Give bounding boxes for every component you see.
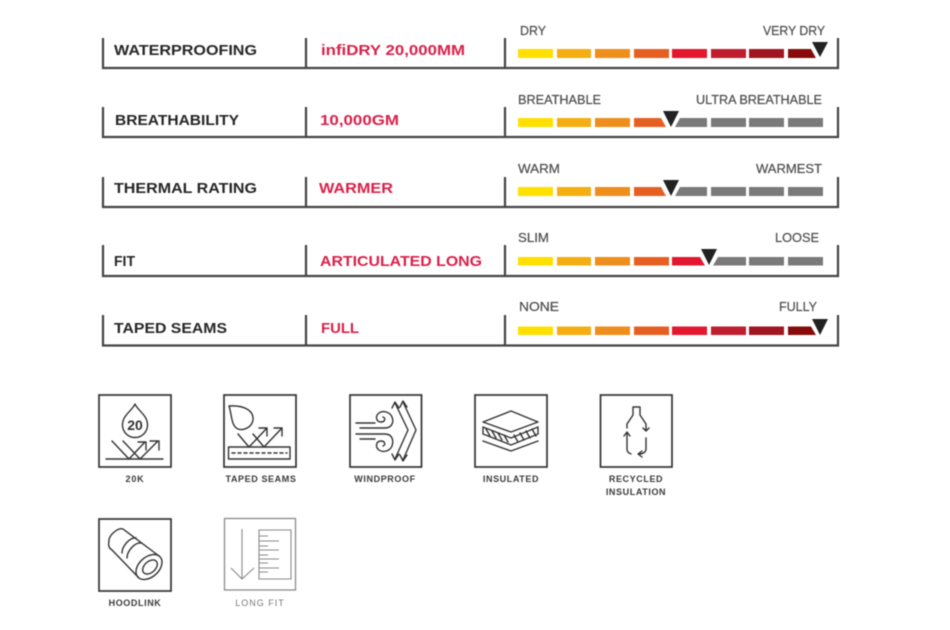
- scale label: slim: SLIM: [518, 231, 549, 245]
- scale label: ultra breathable: ULTRA BREATHABLE: [696, 93, 822, 107]
- label: waterproofing: WATERPROOFING: [114, 42, 257, 59]
- marker: [663, 180, 679, 196]
- scale label: warm: WARM: [518, 162, 560, 176]
- caption: recycled insulation: RECYCLED: [609, 474, 663, 484]
- icon: insulated: [475, 395, 547, 484]
- rating bar: taped seams: [518, 326, 816, 335]
- marker: [812, 42, 828, 57]
- row: taped seams: [103, 300, 838, 346]
- scale label: fully: FULLY: [779, 300, 818, 314]
- rating bar: thermal rating: [518, 187, 823, 196]
- caption: windproof: WINDPROOF: [354, 474, 416, 484]
- row: breathability: [103, 93, 838, 137]
- value: warmer: WARMER: [319, 180, 393, 197]
- icon: long fit: [224, 518, 296, 608]
- row: waterproofing: [103, 24, 838, 68]
- label: thermal rating: THERMAL RATING: [114, 180, 257, 197]
- icon: recycled insulation: [600, 395, 672, 497]
- icon: hoodlink: [99, 519, 171, 608]
- icon: 20K: [99, 395, 171, 484]
- row: fit: [103, 231, 838, 276]
- caption: insulated: INSULATED: [483, 474, 539, 484]
- icon: taped seams: [224, 395, 296, 484]
- marker: [663, 111, 679, 127]
- value: infiDRY 20,000MM: infiDRY 20,000MM: [321, 42, 465, 59]
- rating bar: waterproofing: [518, 49, 816, 58]
- label: breathability: BREATHABILITY: [115, 112, 239, 129]
- value: articulated long: ARTICULATED LONG: [320, 253, 482, 270]
- scale label: breathable: BREATHABLE: [518, 93, 601, 107]
- value: full: FULL: [321, 320, 359, 337]
- caption: 20K: 20K: [126, 474, 144, 484]
- icon: 20K: 20: [127, 417, 143, 433]
- scale label: none: NONE: [519, 300, 559, 314]
- caption: long fit: LONG FIT: [235, 598, 285, 608]
- label: fit: FIT: [114, 253, 135, 270]
- marker: [812, 319, 828, 335]
- row: thermal rating: [103, 162, 838, 207]
- rating bar: breathability: [518, 118, 823, 127]
- icon: recycled insulation: INSULATION: [606, 487, 666, 497]
- scale label: loose: LOOSE: [775, 231, 819, 245]
- scale label: warmest: WARMEST: [756, 162, 822, 176]
- rating bar: fit: [518, 257, 823, 266]
- scale label: dry: DRY: [520, 24, 547, 38]
- scale label: very dry: VERY DRY: [763, 24, 826, 38]
- value: 10,000GM: 10,000GM: [320, 112, 399, 129]
- caption: taped seams: TAPED SEAMS: [226, 474, 296, 484]
- marker: [701, 249, 717, 265]
- label: taped seams: TAPED SEAMS: [114, 320, 227, 337]
- caption: hoodlink: HOODLINK: [109, 598, 161, 608]
- icon: windproof: [350, 395, 422, 484]
